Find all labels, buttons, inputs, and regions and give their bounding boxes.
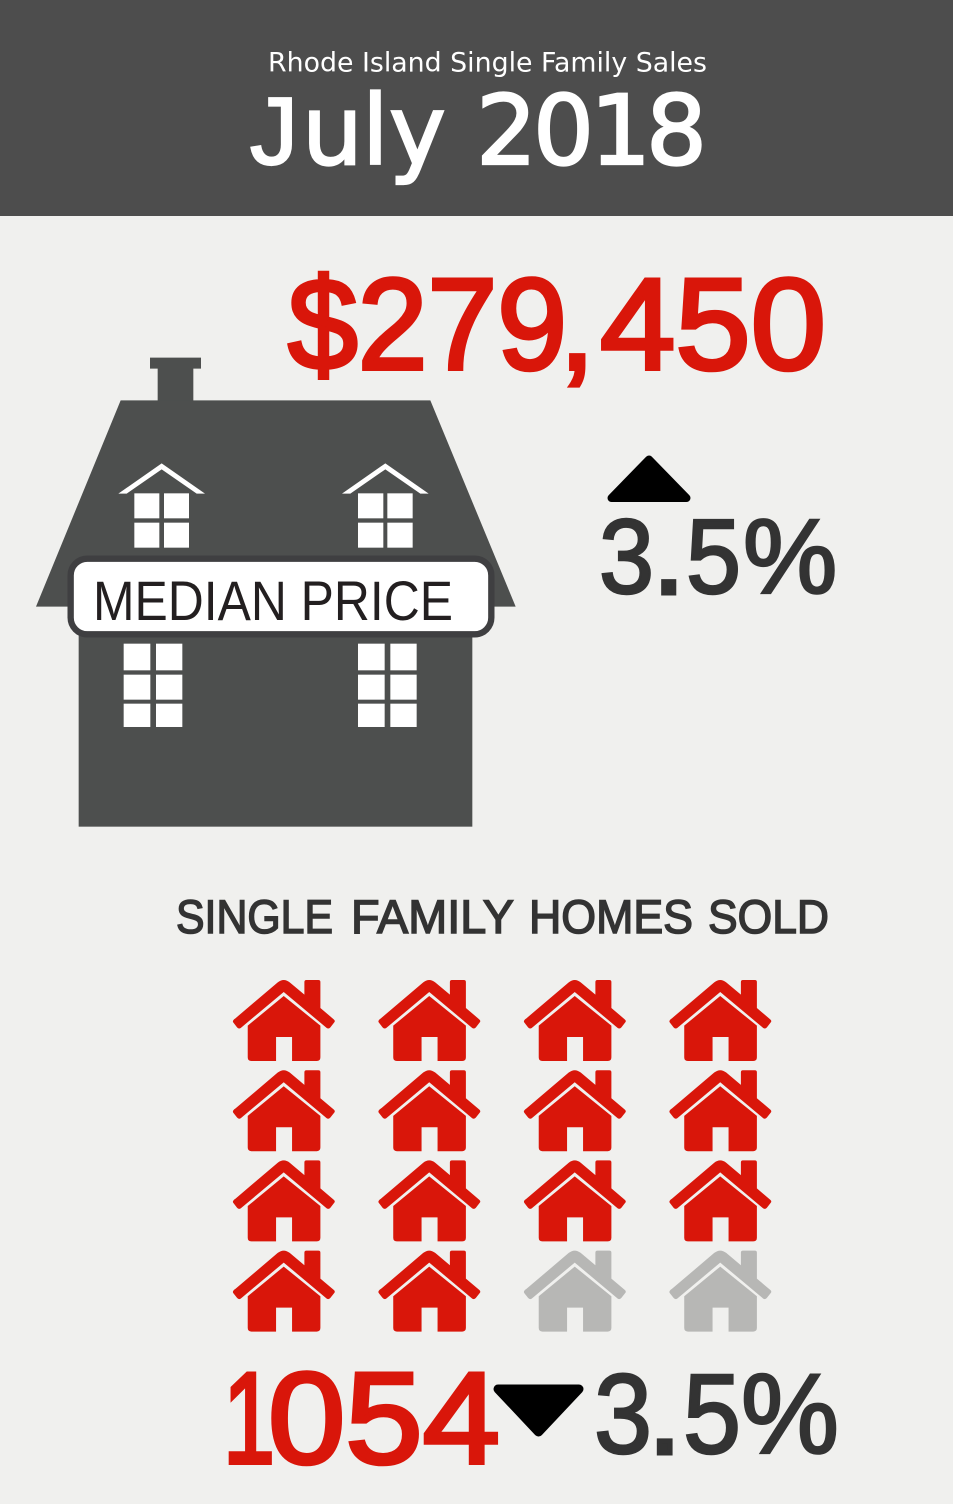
icon: large house with median price sign bbox=[36, 358, 516, 827]
homes sold count: 054 bbox=[268, 1345, 500, 1491]
price change percentage bbox=[599, 498, 837, 616]
header band bbox=[0, 0, 953, 216]
homes sold heading bbox=[176, 890, 829, 943]
sales change percentage: . bbox=[649, 1351, 680, 1477]
sales change percentage bbox=[594, 1351, 839, 1477]
sales change percentage: 5 bbox=[683, 1351, 741, 1477]
title: l bbox=[362, 75, 389, 187]
sales change percentage: 3 bbox=[594, 1351, 652, 1477]
sign plate bbox=[71, 559, 491, 634]
title: 1 bbox=[590, 75, 651, 187]
right dormer bbox=[342, 463, 429, 548]
roof bbox=[36, 400, 516, 607]
icon: down arrow bbox=[498, 1389, 579, 1432]
median price value: , bbox=[559, 251, 595, 397]
house body bbox=[79, 600, 472, 827]
median price value: 450 bbox=[600, 251, 826, 397]
sales change percentage: % bbox=[741, 1351, 839, 1477]
title: y bbox=[389, 75, 446, 187]
median price label: MEDIAN PRICE bbox=[93, 569, 453, 632]
homes sold heading: HOMES bbox=[529, 890, 693, 943]
homes sold heading: SOLD bbox=[708, 890, 829, 943]
price change percentage: 3 bbox=[599, 498, 654, 616]
median price value bbox=[288, 251, 826, 397]
price change percentage: 5 bbox=[686, 498, 741, 616]
left dormer bbox=[118, 463, 205, 548]
homes sold heading: FAMILY bbox=[351, 890, 514, 943]
icon grid: houses sold bbox=[233, 980, 771, 1332]
subtitle: Rhode Island Single Family Sales bbox=[268, 48, 707, 78]
homes sold count: 1 bbox=[223, 1345, 275, 1491]
title: 0 bbox=[533, 75, 594, 187]
title: J bbox=[250, 78, 298, 185]
left lower window bbox=[124, 644, 182, 727]
icon: up arrow bbox=[612, 460, 686, 498]
title: u bbox=[302, 75, 363, 187]
title: 8 bbox=[646, 75, 707, 187]
price change percentage: . bbox=[654, 498, 683, 616]
chimney bbox=[150, 358, 201, 402]
title: 2 bbox=[476, 75, 537, 187]
homes sold heading: SINGLE bbox=[176, 890, 333, 943]
right lower window bbox=[358, 644, 417, 727]
median price value: $279 bbox=[288, 251, 567, 397]
price change percentage: % bbox=[743, 498, 837, 616]
